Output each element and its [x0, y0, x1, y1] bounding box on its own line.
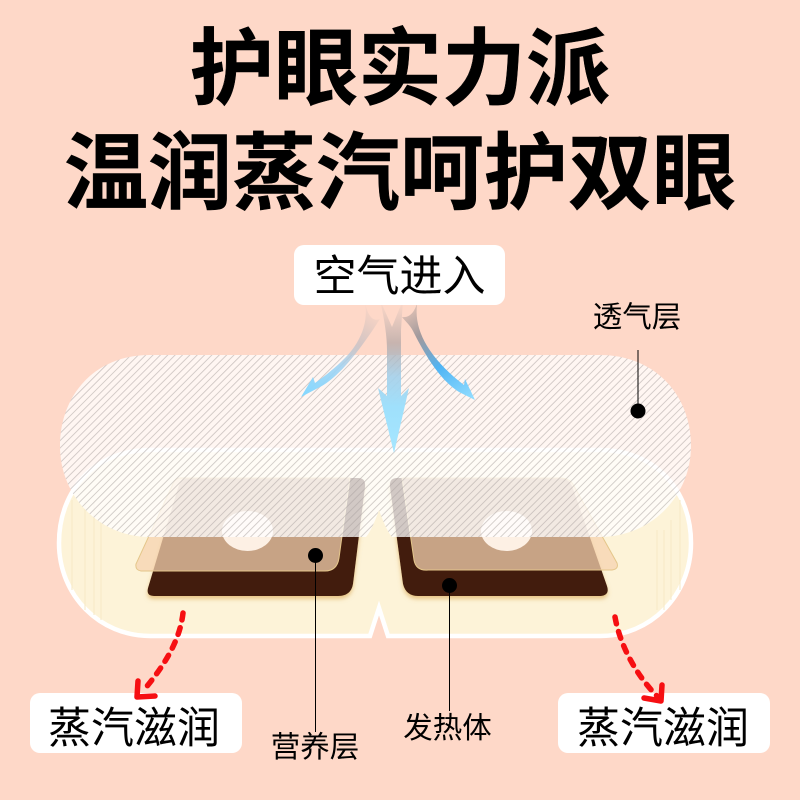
callout text: 发热体	[403, 712, 492, 745]
callout line	[637, 350, 639, 411]
arrow: centre air flow	[378, 300, 409, 453]
callout line	[314, 555, 316, 732]
arrow: left air flow	[301, 303, 380, 397]
arrow: right steam	[615, 617, 662, 701]
callout dot	[308, 548, 323, 563]
label text: 蒸汽滋润	[577, 705, 749, 753]
label: air enters	[294, 245, 505, 305]
mask side stripes	[72, 500, 680, 620]
callout dot	[442, 578, 457, 593]
callout text: 透气层	[593, 301, 681, 334]
title line 1: 护眼实力派	[190, 22, 610, 116]
label: steam right	[558, 693, 770, 753]
label text: 空气进入	[314, 253, 486, 301]
hole left	[222, 511, 273, 551]
callout: nutrient layer	[271, 548, 359, 764]
mask base layer	[59, 450, 691, 636]
label box	[294, 245, 505, 305]
title line 2: 温润蒸汽呵护双眼	[64, 126, 736, 220]
air arrows	[301, 300, 475, 453]
hole right	[481, 511, 532, 551]
breathable hatched layer	[60, 355, 691, 537]
label box	[558, 693, 770, 753]
callout: breathable layer	[593, 301, 681, 418]
callout: heating body	[403, 578, 492, 745]
label: steam left	[30, 693, 242, 753]
nutrient layer left	[136, 478, 350, 571]
callout text: 营养层	[271, 731, 359, 764]
arrow: right air flow	[402, 300, 475, 400]
callout dot	[630, 404, 646, 418]
title	[64, 22, 736, 220]
eye mask diagram	[59, 355, 691, 636]
label box	[30, 693, 242, 753]
heating body right	[390, 478, 608, 596]
callout line	[448, 585, 450, 711]
arrow: left steam	[137, 613, 183, 697]
label text: 蒸汽滋润	[48, 705, 220, 753]
nutrient layer right	[402, 478, 617, 570]
heating body left	[148, 478, 365, 596]
